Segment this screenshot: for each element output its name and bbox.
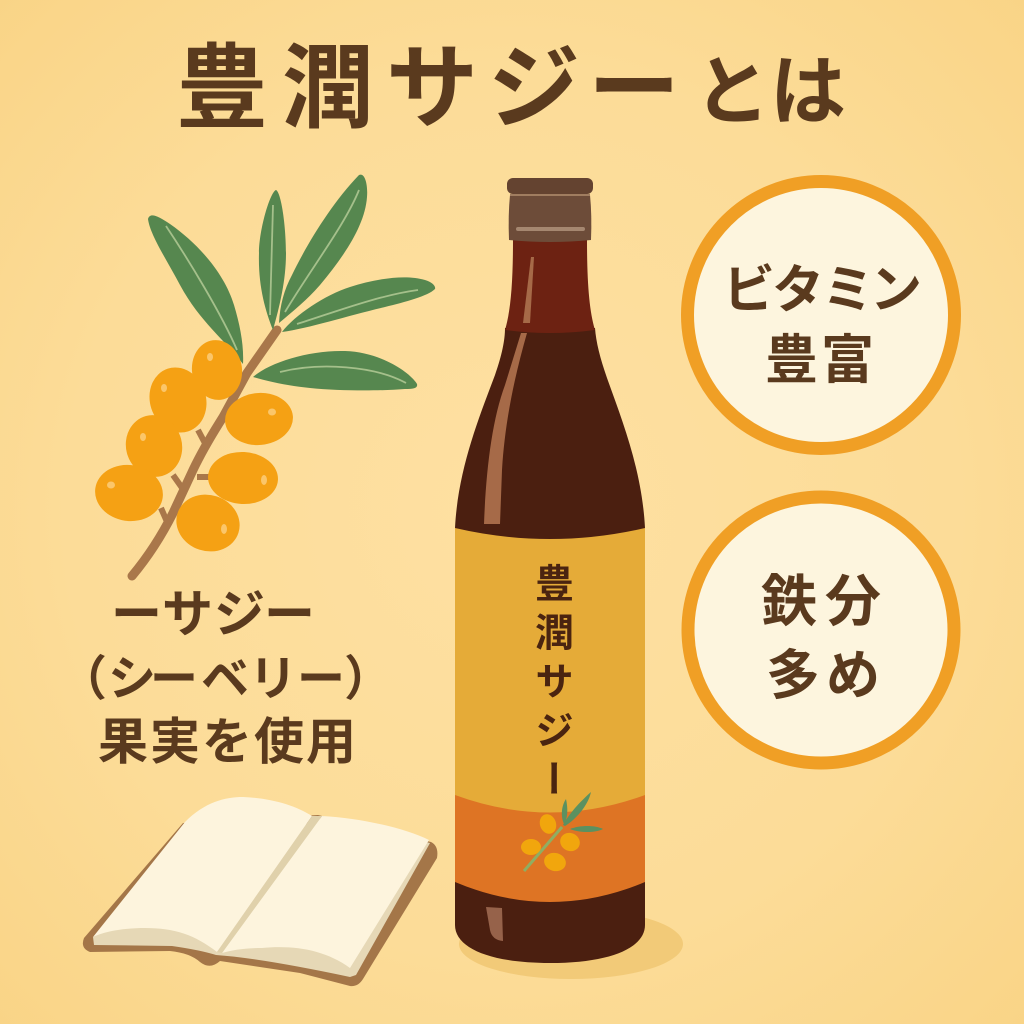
title: とは	[694, 50, 846, 135]
caption: sea buckthorn fruit used: （シーベリー）	[59, 653, 392, 706]
badge: vitamin rich: 豊富	[765, 331, 874, 390]
book cover	[83, 815, 437, 986]
body highlight	[484, 333, 527, 524]
badge: rich in iron: 鉄分	[761, 570, 881, 633]
caption: sea buckthorn fruit used	[59, 586, 392, 770]
book spine shadow	[217, 816, 322, 953]
leaf: lower right	[253, 351, 417, 390]
neck highlight	[523, 257, 534, 323]
badge: rich in iron	[688, 497, 954, 763]
title: 豊潤サジー	[176, 38, 680, 140]
caption: sea buckthorn fruit used: 果実を使用	[98, 714, 356, 770]
leaf: upper middle	[259, 190, 286, 330]
bottle cap	[507, 178, 593, 242]
leaf: right	[282, 277, 435, 332]
bottle neck glass	[505, 240, 595, 333]
bottom highlight	[486, 907, 503, 941]
illustration: bottle	[455, 178, 645, 963]
badge: vitamin rich	[688, 182, 954, 448]
leaf: upper right	[279, 175, 367, 323]
bottle lower glass	[455, 328, 645, 963]
label emblem: branch	[521, 792, 603, 874]
label: yellow	[455, 528, 645, 813]
badge: vitamin rich: ビタミン	[723, 262, 922, 320]
branch stem	[132, 330, 277, 576]
illustration: sea buckthorn branch	[91, 175, 435, 576]
berries	[91, 337, 295, 560]
illustration: open book	[83, 797, 437, 986]
label: orange	[455, 795, 645, 902]
label name: 豊潤サジー	[530, 563, 573, 808]
bottle shadow	[459, 909, 683, 979]
leaf: upper left	[148, 215, 243, 364]
side twigs	[161, 430, 216, 524]
badge: rich in iron: 多め	[766, 646, 880, 706]
right page	[222, 816, 429, 968]
left page	[93, 797, 312, 952]
caption: sea buckthorn fruit used: ーサジー	[111, 586, 315, 643]
berry highlights	[107, 353, 276, 534]
book page edges	[93, 818, 430, 977]
